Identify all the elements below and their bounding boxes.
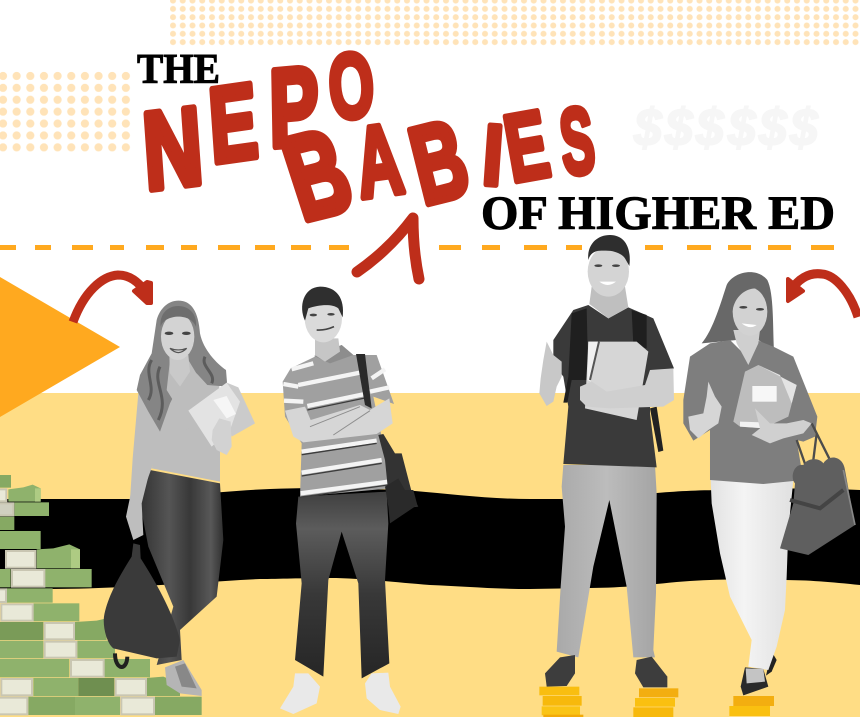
faint dollar signs: $: [633, 98, 662, 156]
coins under left foot: [539, 687, 583, 717]
word: BABIES: A: [348, 102, 409, 219]
word: BABIES: E: [497, 90, 556, 202]
bundle rows: [0, 475, 202, 715]
word: BABIES: I: [480, 106, 506, 204]
coins under right foot: [633, 688, 678, 717]
word: NEPO: N: [139, 83, 206, 214]
money stack: [0, 475, 202, 715]
dot pattern: top band: [170, 0, 860, 47]
background: yellow lower area: [0, 393, 860, 717]
person 4: young woman with handbag: [683, 272, 855, 695]
person 2: boy in striped polo: [280, 287, 418, 714]
title: THE: THE: [137, 47, 220, 93]
background: white upper area: [0, 0, 860, 393]
word: NEPO: P: [268, 43, 320, 170]
black wavy band: [0, 488, 860, 589]
title: OF HIGHER ED: OF HIGHER ED: [481, 187, 835, 240]
torso and head: [130, 301, 255, 500]
word: BABIES: B: [399, 96, 479, 228]
arrow: right curved: [788, 274, 858, 317]
underline swoosh: [357, 218, 419, 279]
word: BABIES: S: [555, 87, 599, 195]
faint dollar signs: $: [664, 98, 693, 156]
legs and backpack: [104, 470, 223, 696]
coin stacks: [539, 687, 774, 717]
dot pattern: left block: [0, 70, 131, 153]
torso, notebooks and head: [539, 235, 674, 467]
white pants and shoes: [711, 480, 793, 695]
shoulder bag: [385, 478, 417, 523]
shirt, notebooks and head: [683, 272, 837, 484]
faint dollar signs: $: [695, 98, 724, 156]
person 3: young man with notebooks: [539, 235, 674, 687]
pants and shoes: [545, 465, 667, 687]
word: NEPO: E: [205, 62, 261, 186]
word: NEPO: [139, 34, 377, 214]
word: BABIES: [269, 87, 599, 246]
person 1: girl with backpack: [104, 301, 255, 696]
dashed divider: [0, 245, 834, 250]
faint dollar signs: $: [727, 98, 756, 156]
paper money bands: [0, 489, 154, 714]
faint dollar signs: [633, 98, 818, 156]
torso, arms and head: [283, 287, 418, 510]
faint dollar signs: $: [789, 98, 818, 156]
word: NEPO: O: [325, 34, 377, 139]
title: NEPO BABIES hand lettering: [139, 34, 599, 279]
faint dollar signs: $: [758, 98, 787, 156]
coins under far right foot: [729, 696, 774, 716]
jeans and shoes: [280, 492, 401, 714]
word: BABIES: B: [269, 104, 366, 246]
arrow: left curved: [73, 275, 151, 322]
orange triangle: [0, 277, 120, 417]
handbag: [780, 458, 855, 555]
